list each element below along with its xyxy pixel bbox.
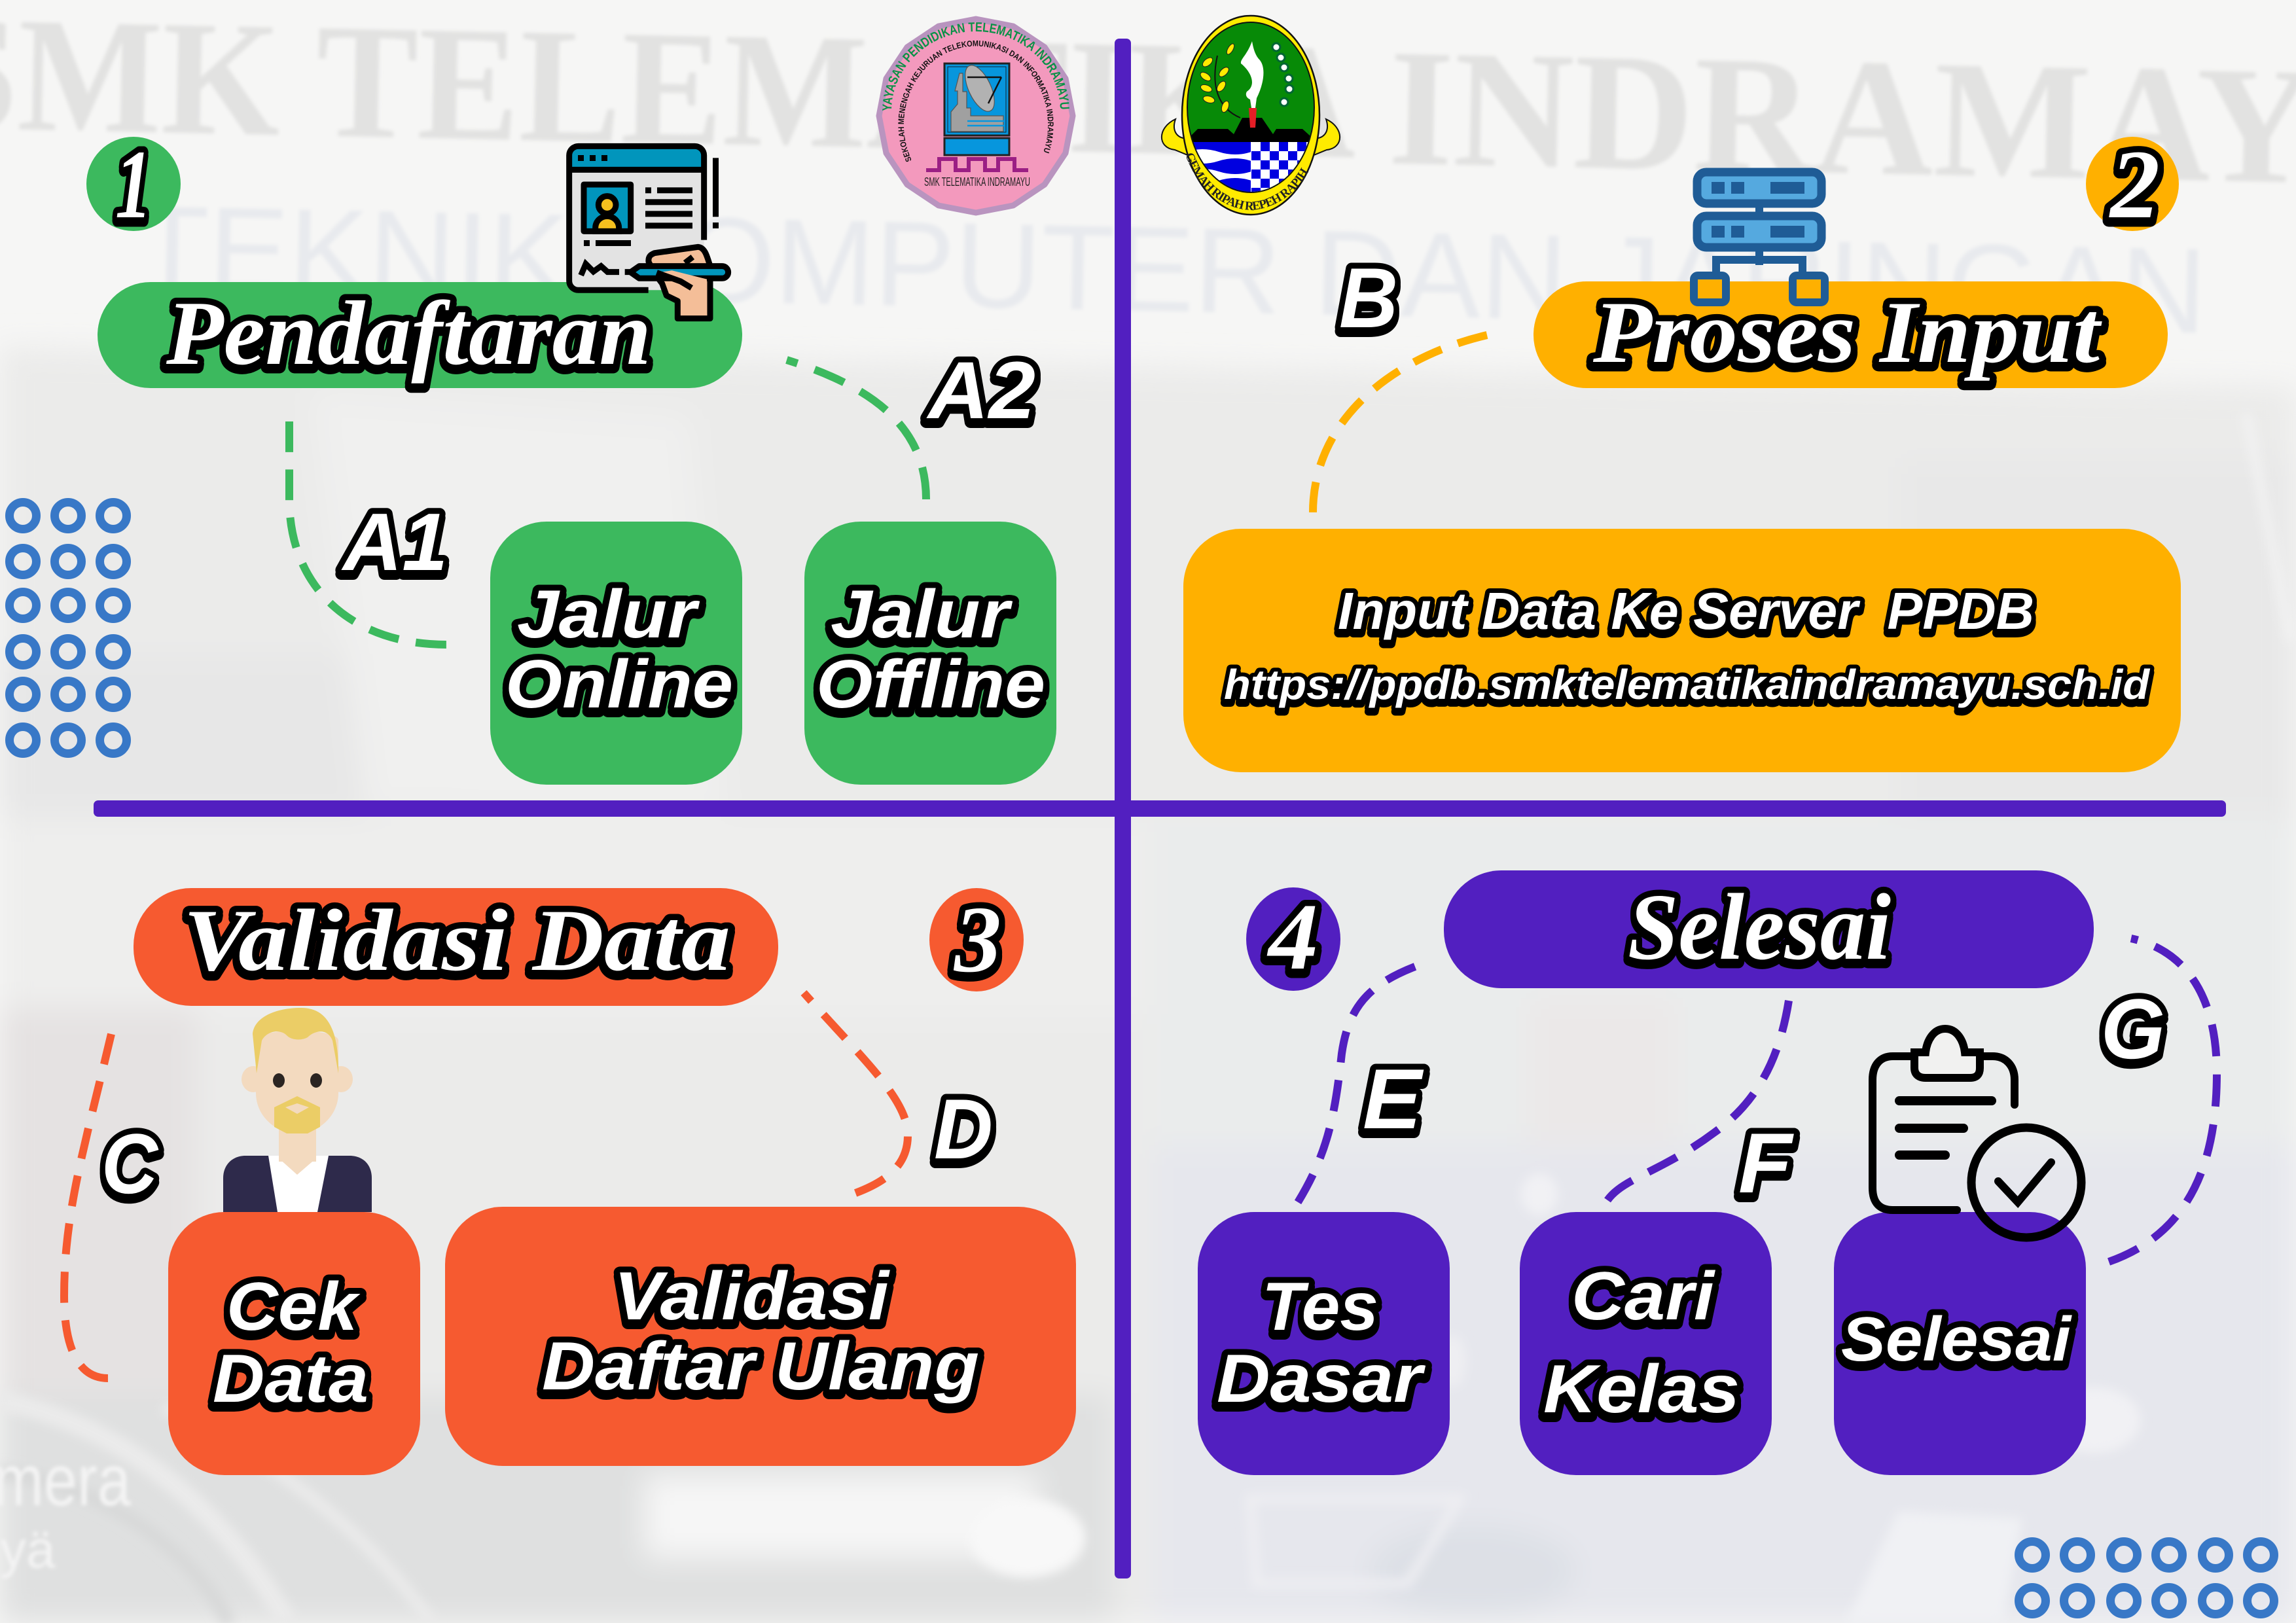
connector A2 <box>787 360 926 499</box>
heading: Selesai <box>1444 870 2094 988</box>
photo text <box>0 1440 132 1578</box>
connector C <box>64 1034 111 1378</box>
panel: step 1 Pendaftaran <box>86 130 1056 785</box>
connector B <box>1313 335 1487 512</box>
logo: SMK Telematika <box>876 16 1076 216</box>
card: Validasi Daftar Ulang: Validasi <box>614 1258 890 1334</box>
label A1: A1 <box>341 497 448 588</box>
heading: Proses Input: Proses Input <box>1592 284 2102 382</box>
card: Cek Data: Data <box>213 1341 368 1417</box>
heading: Validasi Data: Validasi Data <box>183 892 730 990</box>
connector E <box>1298 967 1415 1202</box>
card: Cari Kelas <box>1520 1212 1772 1475</box>
card: Jalur Offline: Offline <box>816 647 1045 722</box>
card: Input Data: https://ppdb.smktelematikaindramayu.sch.id <box>1224 661 2151 708</box>
card: Cari Kelas: Cari <box>1571 1258 1715 1334</box>
card: Jalur Online: Online <box>505 647 733 722</box>
badge 1 <box>86 130 181 239</box>
connector D <box>804 993 908 1193</box>
panel: step 3 Validasi Data <box>64 887 1076 1475</box>
label F: F <box>1738 1115 1795 1211</box>
badge 1: 1 <box>115 130 152 239</box>
card: Jalur Online <box>490 522 742 785</box>
card: Input Data: Input Data Ke Server PPDB <box>1338 582 2034 640</box>
badge 2 <box>2086 130 2179 239</box>
heading: Validasi Data <box>134 888 778 1006</box>
icon: server <box>1694 172 1825 302</box>
card: Tes Dasar: Tes <box>1262 1269 1378 1345</box>
card: Selesai <box>1834 1212 2086 1475</box>
card: Cek Data: Cek <box>226 1269 361 1345</box>
card: Jalur Offline: Jalur <box>831 577 1013 652</box>
watermark heading <box>0 0 2296 364</box>
label B: B <box>1339 250 1398 346</box>
dots left <box>9 503 127 754</box>
panel: step 2 Proses Input <box>1183 130 2181 772</box>
logo: Jawa Barat <box>1161 14 1340 216</box>
card: Tes Dasar: Dasar <box>1217 1341 1426 1417</box>
badge 4 <box>1246 885 1340 991</box>
card: Input Data <box>1183 529 2181 772</box>
connector F <box>1607 1001 1789 1200</box>
connector A1 <box>289 421 446 645</box>
card: Selesai: Selesai <box>1841 1304 2072 1374</box>
card: Validasi Daftar Ulang: Daftar Ulang <box>542 1329 979 1404</box>
badge 2: 2 <box>2109 130 2160 239</box>
photo text: yä <box>0 1520 56 1578</box>
logo: SMK Telematika: YAYASAN PENDIDIKAN TELEMATIKA INDRAMAYU <box>882 22 1069 111</box>
logo: SMK Telematika: SMK TELEMATIKA INDRAMAYU <box>924 175 1030 188</box>
icon: clipboard check <box>1873 1029 2081 1238</box>
label D: D <box>934 1081 993 1177</box>
card: Cari Kelas: Kelas <box>1543 1351 1740 1427</box>
panel: step 4 Selesai <box>1198 870 2217 1475</box>
heading: Proses Input <box>1534 281 2168 388</box>
connector G <box>2109 938 2217 1262</box>
logo: SMK Telematika: SEKOLAH MENENGAH KEJURUAN TELEKOMUNIKASI DAN INFORMATIKA INDRAMAYU <box>898 41 1054 162</box>
dots bottom right <box>2018 1542 2274 1614</box>
illustration: person <box>223 1008 372 1212</box>
watermark heading: TEKNIK KOMPUTER DAN JARINGAN <box>134 181 2208 359</box>
card: Jalur Online: Jalur <box>517 577 700 652</box>
card: Jalur Offline <box>804 522 1056 785</box>
card: Validasi Daftar Ulang <box>445 1207 1076 1466</box>
icon: registration form <box>569 146 728 319</box>
badge 4: 4 <box>1266 885 1318 990</box>
badge 3: 3 <box>953 887 1001 992</box>
label E: E <box>1363 1051 1424 1147</box>
card: Tes Dasar <box>1198 1212 1450 1475</box>
logo: Jawa Barat: GEMAH RIPAH REPEH RAPIH <box>1186 153 1309 211</box>
card: Cek Data <box>168 1212 420 1475</box>
badge 3 <box>929 887 1024 992</box>
label G: G <box>2101 981 2165 1077</box>
label A2: A2 <box>926 346 1035 436</box>
heading: Pendaftaran: Pendaftaran <box>166 283 651 384</box>
heading: Selesai: Selesai <box>1628 875 1891 980</box>
label C: C <box>101 1116 159 1211</box>
